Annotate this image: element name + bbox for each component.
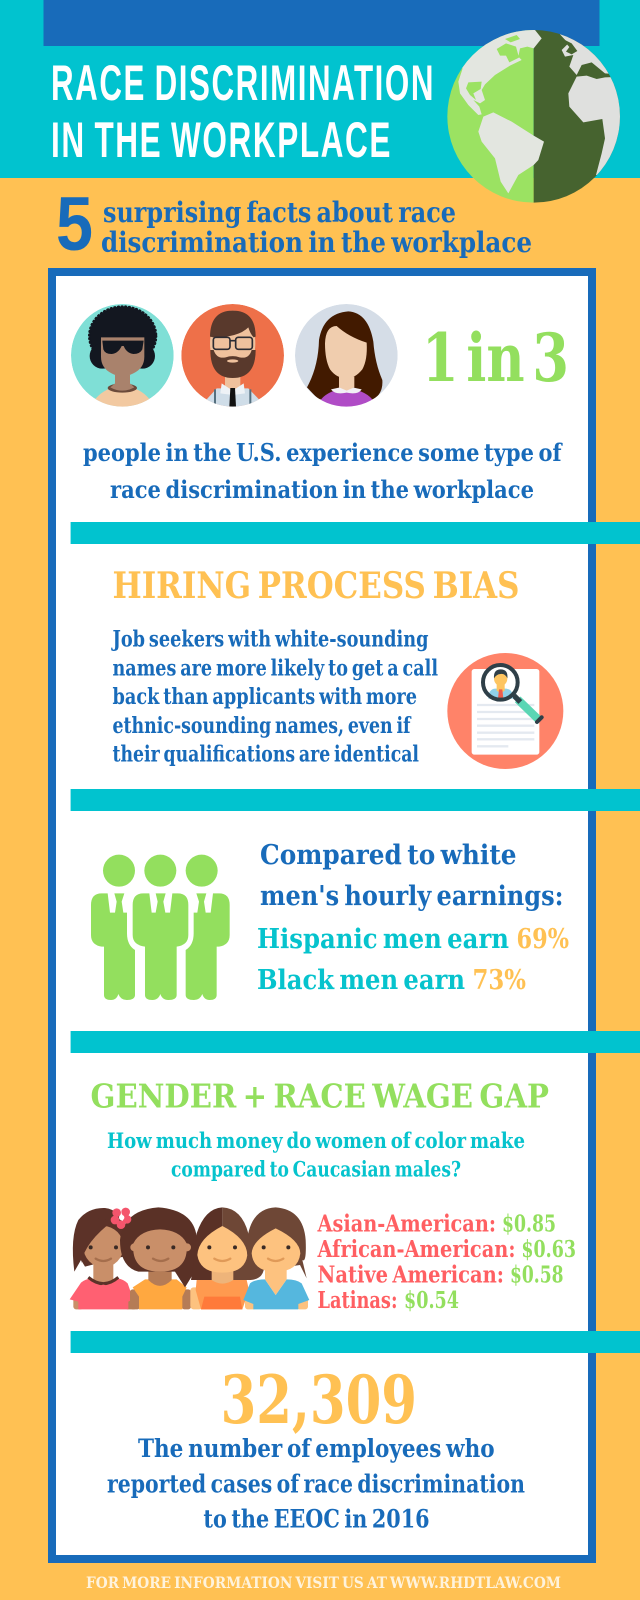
text: eeoc statement: The number of employees who — [138, 1434, 495, 1463]
subtitle: big five: 5 — [56, 182, 93, 267]
row: native american: $0.58 — [510, 1262, 564, 1289]
text: eeoc statement: to the EEOC in 2016 — [203, 1505, 430, 1534]
panel: facts — [52, 272, 592, 1559]
icon: globe — [447, 30, 620, 203]
text: hiring body: ethnic-sounding names, even if — [112, 713, 412, 739]
girl four — [243, 1207, 309, 1309]
text: people statement: people in the U.S. experience some type of — [83, 438, 563, 467]
subtitle — [101, 196, 532, 259]
stat: 32,309: 32,309 — [221, 1361, 417, 1439]
row: latinas: $0.54 — [404, 1287, 459, 1314]
text: wage gap question: compared to Caucasian males? — [171, 1157, 461, 1182]
icon: three men in suits — [91, 855, 230, 1000]
avatars — [71, 304, 398, 413]
row: asian-american: $0.85 — [502, 1211, 556, 1238]
stat: 1 in 3: 1 in 3 — [422, 319, 569, 397]
text: hiring body: their qualifications are identical — [112, 742, 419, 768]
text: wage gap question: How much money do women of color make — [107, 1128, 525, 1153]
footer: FOR MORE INFORMATION VISIT US AT WWW.RHDTLAW.COM — [86, 1573, 561, 1592]
text: black men earn 73%: Black men earn — [257, 965, 465, 996]
subtitle: discrimination in the workplace — [101, 226, 532, 259]
text: black men earn 73%: 73% — [472, 965, 526, 996]
text: eeoc statement: reported cases of race discrimination — [107, 1470, 525, 1499]
girl two — [120, 1207, 198, 1309]
header band — [0, 0, 640, 178]
text: earnings heading — [260, 840, 564, 912]
title — [51, 55, 435, 168]
icon: resume under magnifier — [447, 653, 563, 769]
text: people statement: race discrimination in the workplace — [110, 475, 534, 504]
icon: avatar with afro — [71, 304, 174, 413]
text: earnings heading: Compared to white — [260, 840, 516, 871]
heading: hiring process bias: HIRING PROCESS BIAS — [112, 565, 520, 607]
row: asian-american: Asian-American: — [317, 1211, 496, 1238]
divider band 4 — [71, 1331, 640, 1353]
row: native american: Native American: — [318, 1262, 504, 1289]
girl one — [70, 1208, 137, 1309]
divider band 2 — [71, 789, 640, 811]
text: hiring body: back than applicants with more — [112, 684, 417, 710]
row: african-american: $0.63 — [521, 1236, 576, 1263]
girl three — [190, 1207, 264, 1309]
text: hispanic men earn 69%: Hispanic men earn — [257, 924, 509, 955]
divider band 1 — [71, 522, 640, 544]
row: african-american: African-American: — [317, 1236, 516, 1263]
text: earnings heading: men's hourly earnings: — [260, 881, 564, 912]
text: wage gap question — [107, 1128, 525, 1182]
title: IN THE WORKPLACE — [51, 112, 392, 168]
text: hispanic men earn 69%: 69% — [516, 924, 569, 955]
divider band 3 — [71, 1031, 640, 1053]
wage gap list — [317, 1211, 576, 1314]
text: people statement — [83, 438, 563, 504]
text: eeoc statement — [107, 1434, 525, 1534]
icon: avatar with long hair — [295, 304, 398, 413]
heading: gender + race wage gap: GENDER + RACE WAGE GAP — [90, 1077, 549, 1116]
icon: avatar with beard — [181, 304, 284, 413]
text: hiring body: names are more likely to get a call — [112, 656, 438, 682]
row: latinas: Latinas: — [318, 1287, 398, 1314]
flower — [111, 1208, 131, 1229]
text: hiring body — [111, 627, 438, 768]
text: hiring body: Job seekers with white-sounding — [111, 627, 429, 653]
icon: four women — [70, 1207, 309, 1309]
subtitle: surprising facts about race — [103, 196, 456, 229]
